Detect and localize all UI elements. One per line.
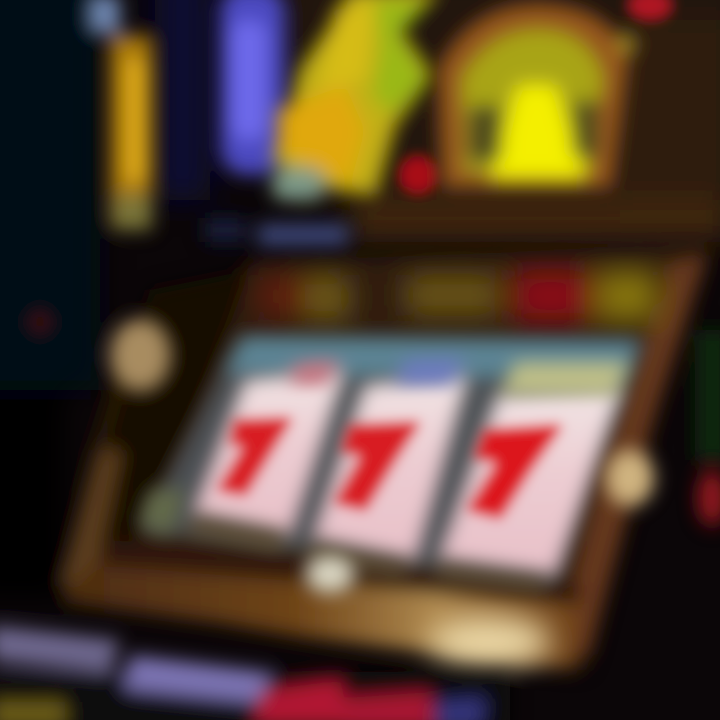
reel window [140,335,645,585]
upper dark brown machine top [285,0,720,242]
reel 1 [192,360,345,535]
reel 3 [438,362,630,575]
right side lights [695,330,720,526]
red seven 1 [218,418,292,495]
blue purple light strip [205,0,348,246]
lower gold highlight [430,618,550,666]
left dark navy column [0,0,210,600]
reel bottoms shading [140,490,550,592]
red seven 2 [335,422,420,510]
left dim red dot [26,308,54,336]
machine frame [58,245,708,670]
yellow light strip [88,0,152,230]
red light below ornament [399,156,437,194]
top right red light [628,0,672,20]
top indicator lights row [258,270,658,322]
arch ornament [438,4,636,188]
red seven 3 [468,425,562,518]
yellow-green ornament [272,0,440,200]
bottom lights [0,625,510,720]
side lamps [110,319,654,592]
reel 2 [312,358,468,560]
